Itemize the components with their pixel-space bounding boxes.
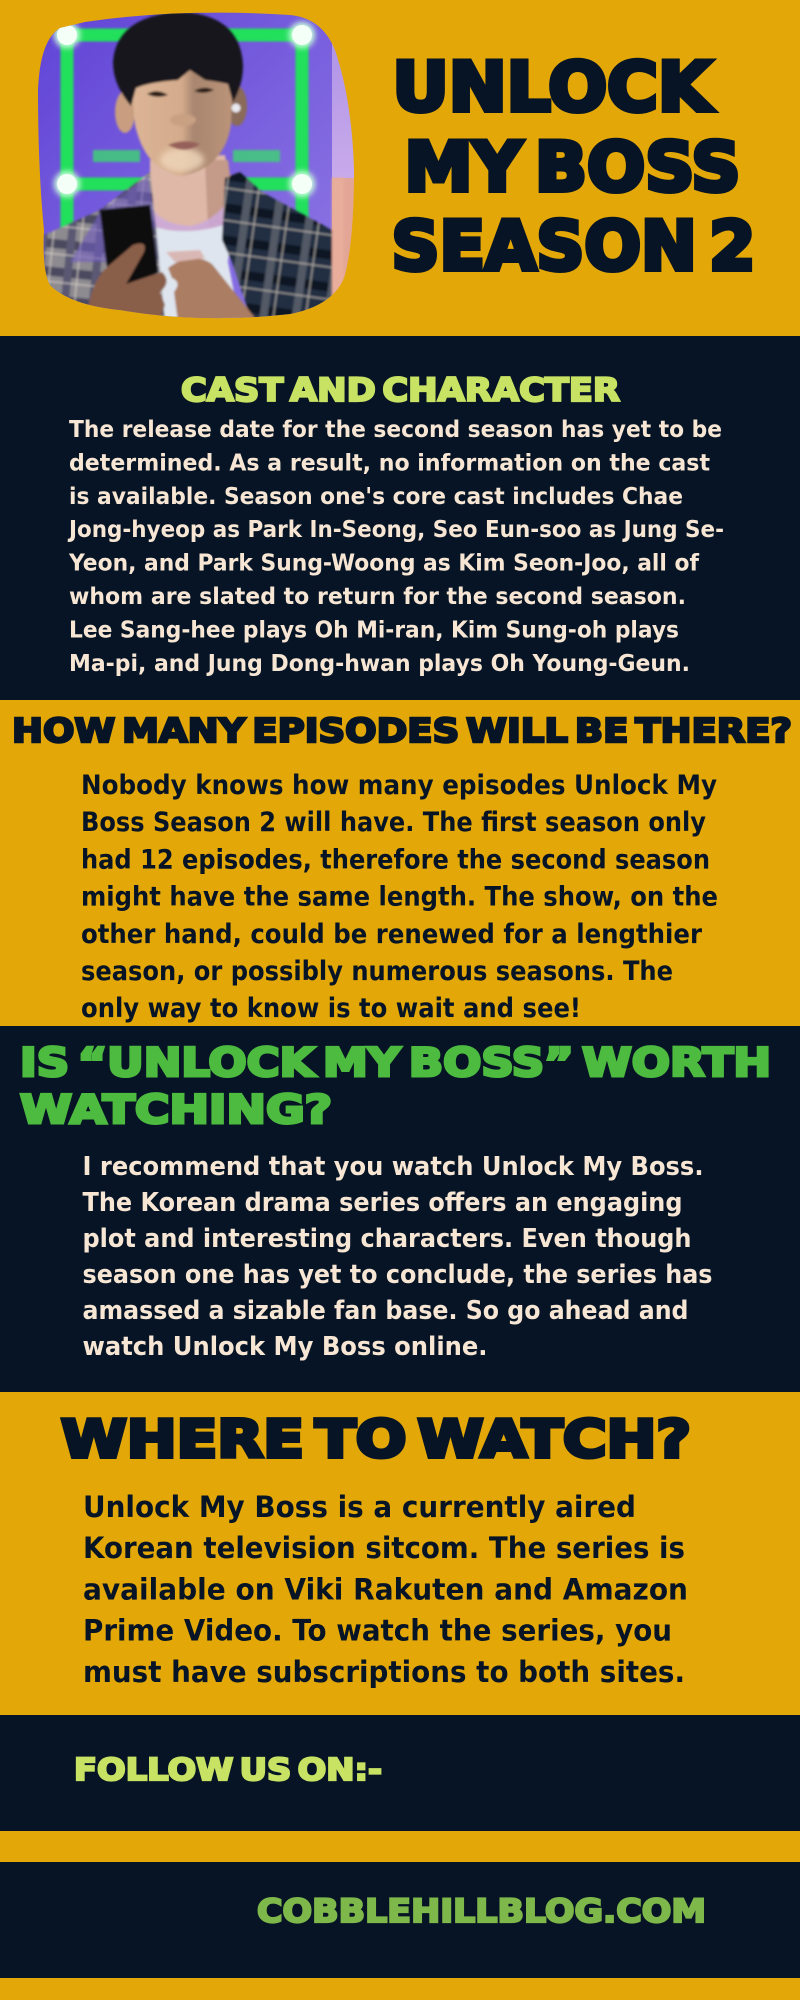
text block: cast description: The release date for the second season has yet to be bbox=[69, 415, 722, 443]
text block: cast description: Lee Sang-hee plays Oh Mi-ran, Kim Sung-oh plays bbox=[69, 615, 679, 643]
heading: follow us on: FOLLOW US ON:- bbox=[74, 1753, 382, 1788]
heading: how many episodes: HOW MANY EPISODES WILL BE THERE? bbox=[12, 711, 792, 750]
text block: episodes description bbox=[81, 770, 718, 1024]
text block: recommendation: The Korean drama series offers an engaging bbox=[82, 1188, 682, 1218]
text block: streaming sites: must have subscriptions to both sites. bbox=[83, 1655, 685, 1689]
text block: episodes description: might have the same length. The show, on the bbox=[81, 882, 718, 913]
panel: header bbox=[38, 12, 752, 318]
text block: recommendation: plot and interesting characters. Even though bbox=[82, 1224, 692, 1254]
text block: recommendation: season one has yet to conclude, the series has bbox=[82, 1260, 712, 1290]
text block: cast description: Ma-pi, and Jung Dong-hwan plays Oh Young-Geun. bbox=[69, 649, 690, 677]
text block: streaming sites bbox=[83, 1490, 688, 1689]
text block: streaming sites: Unlock My Boss is a currently aired bbox=[83, 1490, 636, 1524]
heading: cast and character: CAST AND CHARACTER bbox=[181, 371, 620, 409]
text block: streaming sites: available on Viki Rakuten and Amazon bbox=[83, 1572, 688, 1606]
panel: cast and character bbox=[0, 336, 800, 700]
text block: episodes description: Boss Season 2 will have. The first season only bbox=[81, 807, 706, 838]
text block: episodes description: Nobody knows how many episodes Unlock My bbox=[81, 770, 717, 801]
text block: episodes description: season, or possibly numerous seasons. The bbox=[81, 956, 673, 987]
panel: where to watch bbox=[0, 1392, 800, 1715]
title: UNLOCK bbox=[392, 48, 714, 128]
text block: recommendation bbox=[82, 1152, 712, 1362]
panel: follow us bbox=[0, 1715, 800, 1831]
text block: cast description: Yeon, and Park Sung-Woong as Kim Seon-Joo, all of bbox=[68, 549, 700, 577]
text block: streaming sites: Prime Video. To watch the series, you bbox=[83, 1614, 672, 1648]
text block: cast description: is available. Season one's core cast includes Chae bbox=[69, 482, 683, 510]
text block: cast description bbox=[67, 415, 724, 677]
panel: is it worth watching bbox=[0, 1026, 800, 1392]
website address: COBBLEHILLBLOG.COM bbox=[257, 1892, 706, 1930]
panel: website bbox=[0, 1862, 800, 1978]
text block: episodes description: had 12 episodes, therefore the second season bbox=[81, 844, 710, 875]
text block: recommendation: watch Unlock My Boss online. bbox=[82, 1332, 488, 1362]
text block: episodes description: only way to know is to wait and see! bbox=[81, 993, 581, 1024]
heading: worth watching: WATCHING? bbox=[20, 1087, 332, 1133]
text block: streaming sites: Korean television sitcom. The series is bbox=[83, 1531, 685, 1565]
heading: worth watching bbox=[20, 1040, 771, 1133]
panel: how many episodes bbox=[0, 700, 800, 1026]
text block: cast description: whom are slated to return for the second season. bbox=[69, 582, 686, 610]
text block: cast description: Jong-hyeop as Park In-Seong, Seo Eun-soo as Jung Se- bbox=[67, 515, 724, 543]
title: SEASON 2 bbox=[392, 208, 756, 286]
text block: recommendation: I recommend that you watch Unlock My Boss. bbox=[82, 1152, 704, 1182]
text block: episodes description: other hand, could be renewed for a lengthier bbox=[81, 919, 702, 950]
heading: where to watch: WHERE TO WATCH? bbox=[61, 1410, 691, 1470]
text block: cast description: determined. As a result, no information on the cast bbox=[69, 448, 710, 476]
text block: recommendation: amassed a sizable fan base. So go ahead and bbox=[82, 1296, 688, 1326]
title bbox=[392, 48, 756, 286]
title: MY BOSS bbox=[404, 128, 740, 208]
heading: worth watching: IS “UNLOCK MY BOSS” WORTH bbox=[20, 1040, 771, 1086]
photo: man holding a phone in front of an unlock pattern bbox=[30, 5, 362, 325]
